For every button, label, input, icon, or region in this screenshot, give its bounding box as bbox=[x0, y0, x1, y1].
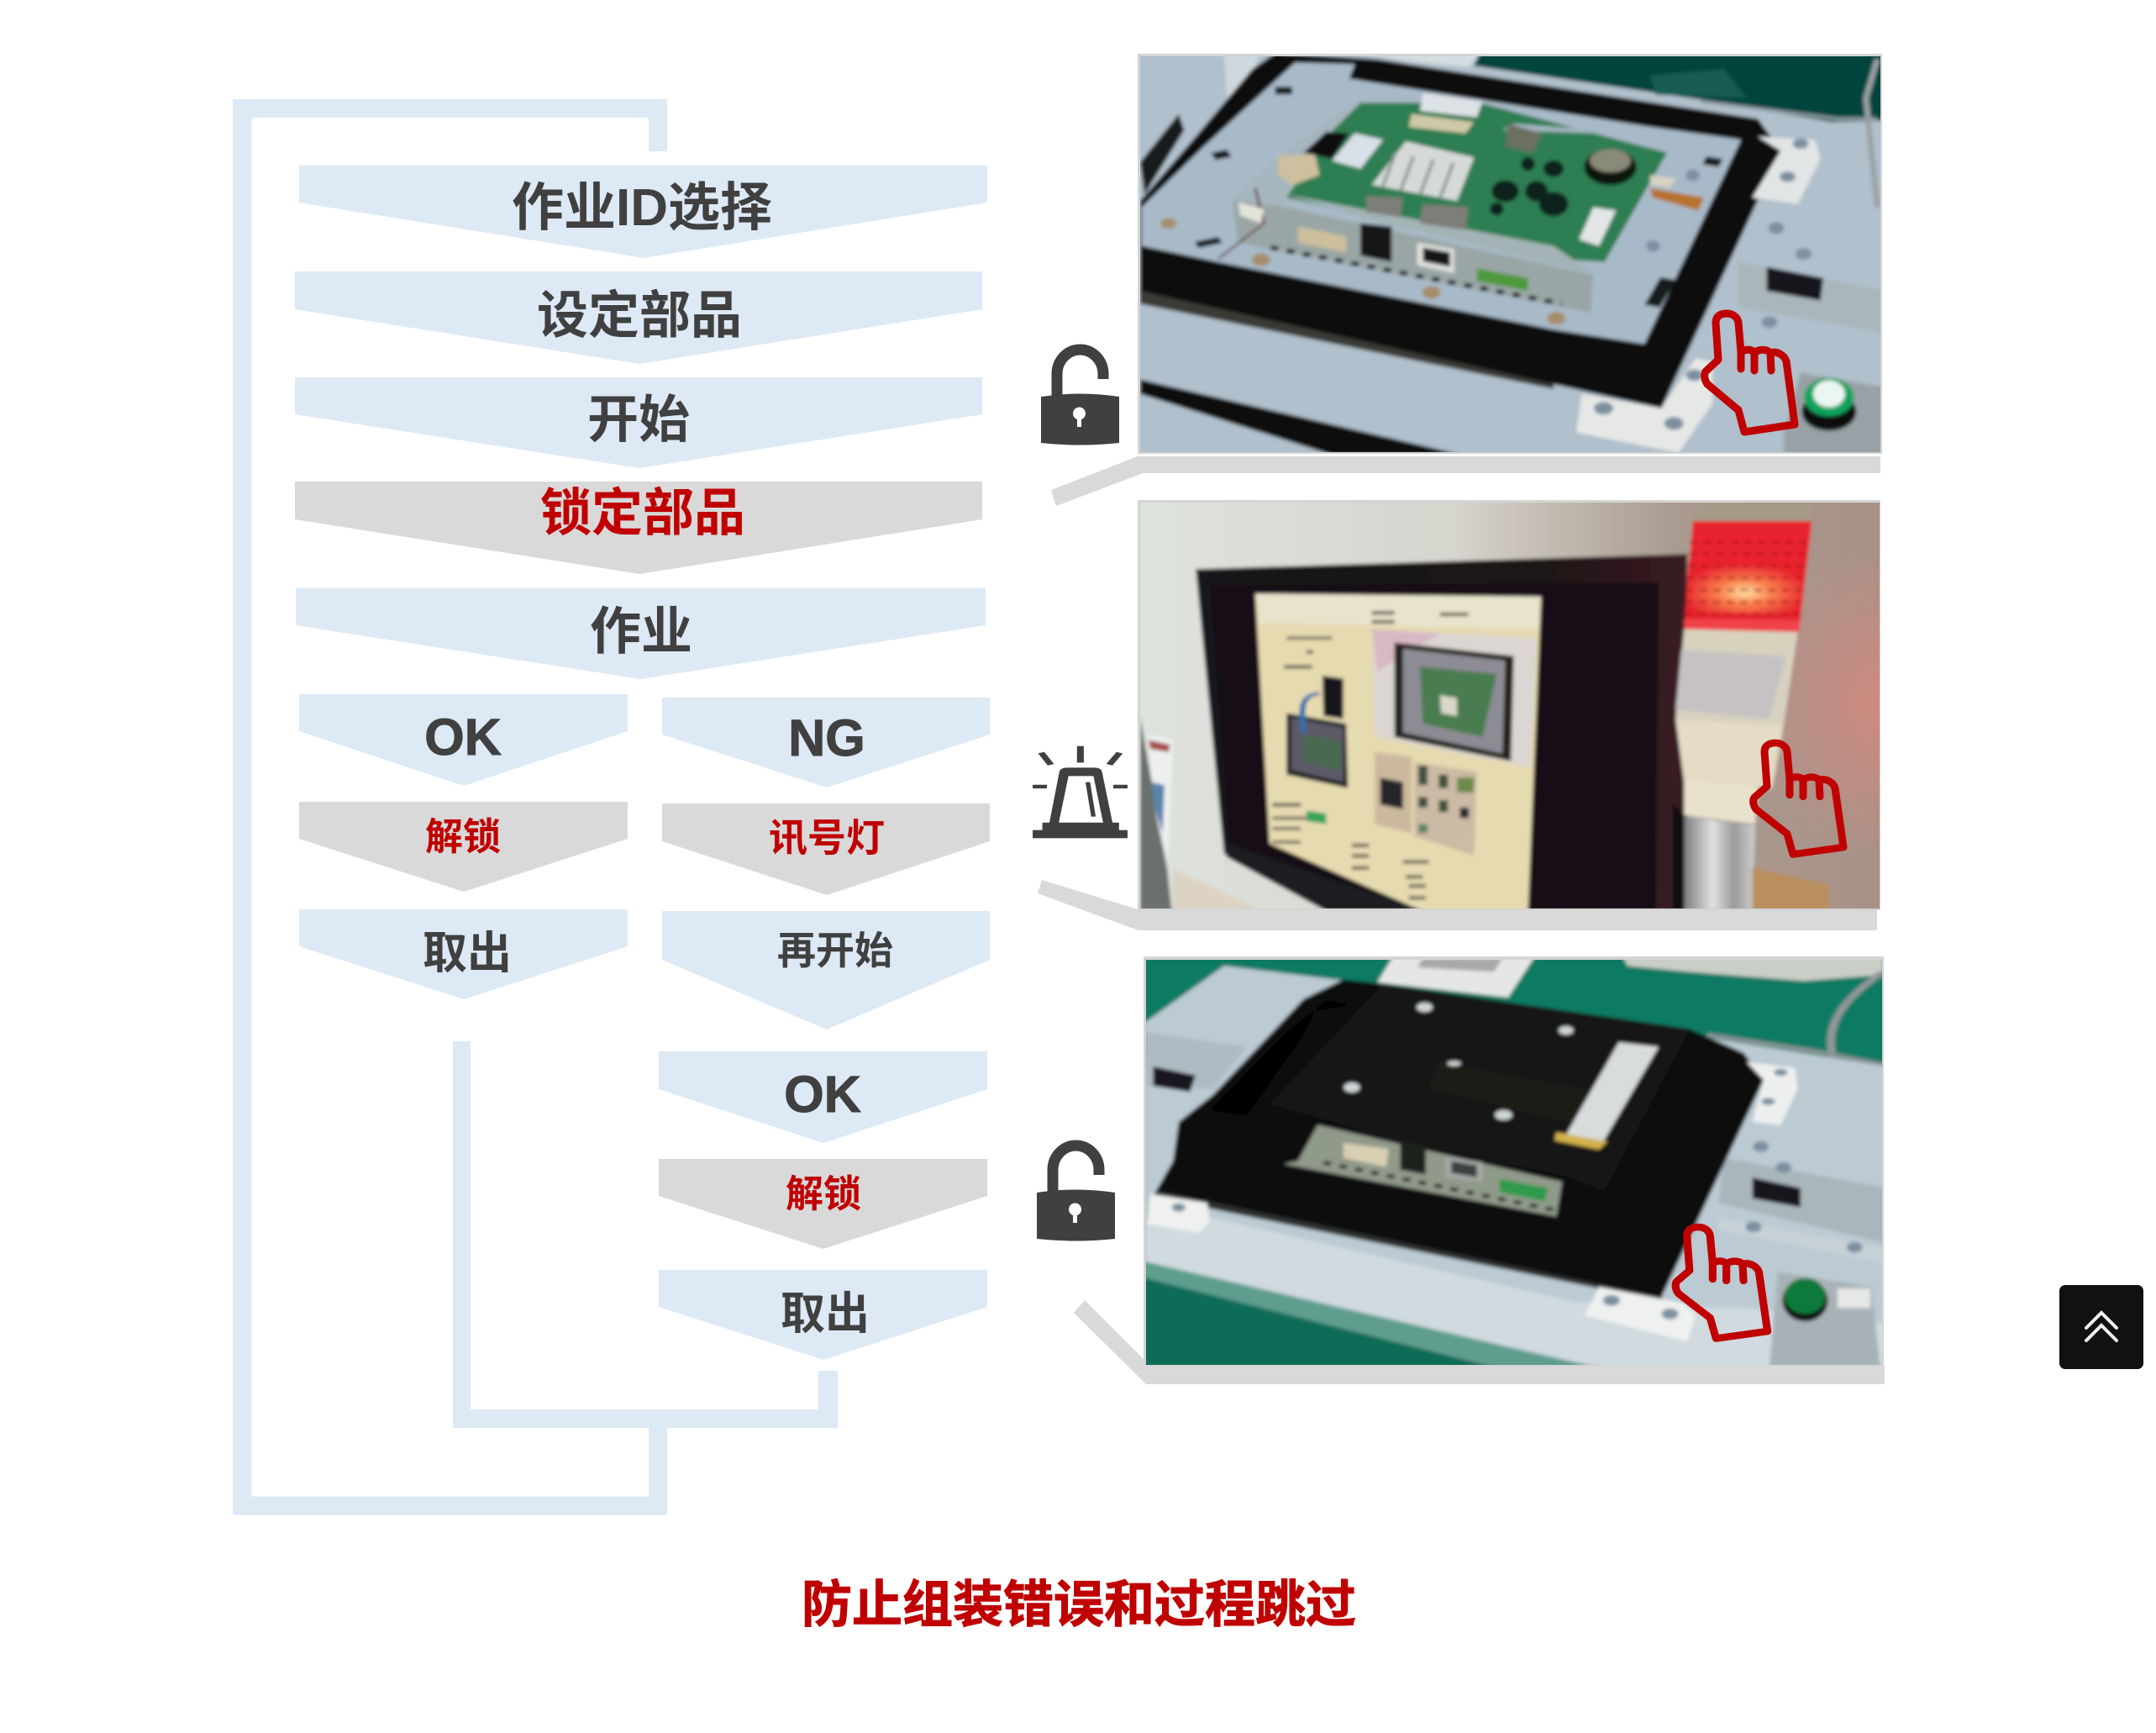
branch left: OK: OK bbox=[424, 708, 502, 766]
photo 2: monitor with red stack light bbox=[1138, 500, 1880, 910]
icon: red hand pointer bbox=[1675, 1227, 1768, 1339]
step: 解锁: 解锁 bbox=[425, 815, 501, 858]
connector band: photo 3 bbox=[1074, 1300, 1885, 1384]
step: 锁定部品: 锁定部品 bbox=[540, 484, 745, 541]
branch right: NG bbox=[662, 698, 990, 787]
step: 作业ID选择: 作业ID选择 bbox=[512, 179, 772, 237]
step: 解锁: 解锁 bbox=[786, 1172, 861, 1215]
connector band: photo 2 bbox=[1038, 880, 1877, 930]
branch left: OK bbox=[299, 694, 628, 786]
branch right: NG: NG bbox=[788, 709, 865, 766]
step: 解锁 bbox=[299, 802, 628, 892]
step: 取出: 取出 bbox=[781, 1289, 870, 1339]
step: 开始 bbox=[295, 377, 982, 468]
back-to-top button bbox=[2059, 1285, 2143, 1369]
step: 作业ID选择 bbox=[299, 166, 987, 258]
step: 取出 bbox=[299, 909, 628, 999]
step: 设定部品 bbox=[295, 271, 982, 364]
step: 开始: 开始 bbox=[587, 391, 690, 448]
step: 取出: 取出 bbox=[423, 929, 512, 978]
step: 讯号灯: 讯号灯 bbox=[769, 816, 885, 860]
step: OK bbox=[659, 1051, 987, 1143]
step: 再开始: 再开始 bbox=[777, 929, 893, 972]
icon: red hand pointer bbox=[1754, 743, 1843, 855]
photo 3: assembled panel rear side bbox=[1133, 951, 1889, 1371]
step: 取出 bbox=[659, 1270, 987, 1360]
photo 1: opened panel with circuit board bbox=[1133, 53, 1889, 458]
step: 作业: 作业 bbox=[590, 603, 692, 660]
icon: unlocked padlock bbox=[1041, 350, 1119, 445]
icon: unlocked padlock bbox=[1037, 1146, 1115, 1240]
outer return loop line bbox=[233, 99, 667, 1515]
step: 作业 bbox=[296, 588, 986, 679]
caption title: 防止组装错误和过程跳过 bbox=[802, 1577, 1356, 1633]
step: 锁定部品 bbox=[295, 482, 982, 574]
step: OK: OK bbox=[784, 1066, 861, 1123]
icon: red hand pointer bbox=[1705, 313, 1795, 432]
step: 设定部品: 设定部品 bbox=[537, 287, 742, 344]
step: 再开始 bbox=[662, 911, 990, 1030]
connector band: photo 1 bbox=[1051, 456, 1880, 506]
step: 解锁 bbox=[659, 1159, 987, 1249]
step: 讯号灯 bbox=[662, 803, 990, 895]
icon: alarm beacon bbox=[1033, 746, 1128, 838]
inner return line bbox=[453, 1041, 838, 1428]
